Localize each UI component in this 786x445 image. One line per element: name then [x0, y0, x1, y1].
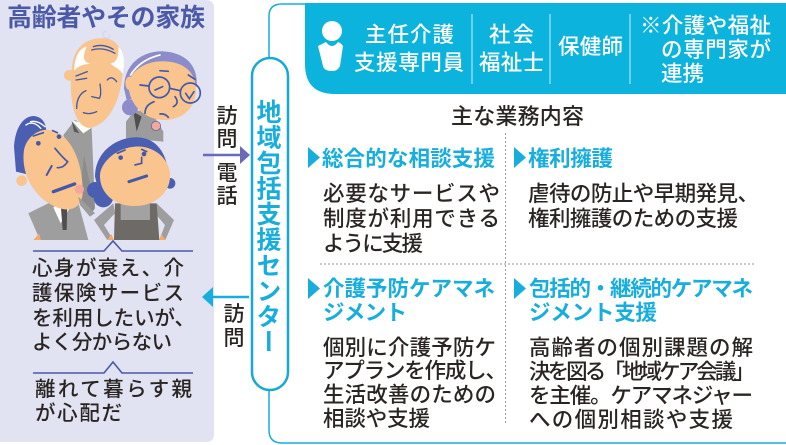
duty: preventive care management: アプランを作成し、 — [323, 359, 507, 383]
speech text two — [35, 378, 192, 425]
label: visit and phone: 電 — [216, 162, 238, 185]
duty: comprehensive continuous care management — [514, 277, 755, 432]
speech text one: 心身が衰え、介 — [32, 257, 184, 280]
arrow: to center — [203, 146, 250, 164]
duty: comprehensive continuous care management: への個別相談や支援 — [529, 408, 733, 432]
duty: general consultation: 必要なサービスや — [323, 182, 500, 206]
label: visit: 訪 — [224, 303, 244, 326]
speech text one: を利用したいが、 — [32, 307, 195, 330]
duty: comprehensive continuous care management: を主催。ケアマネジャー — [529, 384, 753, 408]
role: social worker: 社会 — [489, 23, 534, 47]
speech divider one — [33, 241, 193, 251]
pill: community support center: 地域包括支援センター — [253, 99, 282, 354]
label: visit and phone — [216, 105, 238, 208]
note: cooperation: 連携 — [661, 62, 704, 86]
label: visit and phone: 話 — [216, 185, 238, 208]
role: public health nurse: 保健師 — [558, 35, 623, 59]
illustration: four elderly people — [14, 32, 200, 240]
duty: preventive care management: ジメント — [323, 301, 407, 325]
duty: rights advocacy: 権利擁護 — [528, 147, 613, 171]
duty: rights advocacy: 虐待の防止や早期発見、 — [528, 182, 759, 206]
duty: comprehensive continuous care management: 決を図る「地域ケア会議」 — [529, 360, 755, 384]
label: visit: 問 — [224, 327, 244, 350]
outer frame — [269, 4, 786, 443]
duty: preventive care management: 相談や支援 — [323, 407, 430, 431]
speech text two: 離れて暮らす親 — [35, 378, 192, 401]
duty: general consultation — [308, 147, 500, 256]
note: cooperation: ※介護や福祉 — [640, 14, 771, 38]
role: chief care manager — [354, 23, 464, 75]
duty: comprehensive continuous care management: 高齢者の個別課題の解 — [529, 336, 753, 360]
pill: community support center — [252, 58, 288, 390]
speech text two: が心配だ — [35, 402, 122, 425]
icon: person — [318, 21, 343, 71]
speech text one — [32, 257, 195, 354]
heading: elderly and family: 高齢者やその家族 — [7, 4, 205, 32]
duty: comprehensive continuous care management: ジメント支援 — [529, 301, 657, 325]
duty: preventive care management: 介護予防ケアマネ — [323, 277, 495, 301]
speech divider two — [33, 362, 193, 373]
role: chief care manager: 支援専門員 — [354, 51, 464, 75]
duty: general consultation: 制度が利用できる — [323, 207, 500, 231]
duty: general consultation: ように支援 — [323, 232, 423, 256]
role: social worker — [479, 23, 544, 75]
label: visit — [224, 303, 244, 350]
duty: rights advocacy — [514, 147, 759, 231]
panel: elderly and family — [0, 0, 214, 442]
duty: general consultation: 総合的な相談支援 — [322, 147, 495, 171]
label: visit and phone: 問 — [216, 128, 238, 151]
arrow: to family — [202, 287, 249, 307]
duty: rights advocacy: 権利擁護のための支援 — [528, 207, 738, 231]
duty: preventive care management: 個別に介護予防ケ — [323, 336, 496, 360]
label: visit and phone: 訪 — [216, 105, 238, 128]
role: social worker: 福祉士 — [479, 51, 544, 75]
speech text one: よく分からない — [32, 331, 172, 354]
heading: main duties: 主な業務内容 — [451, 104, 584, 129]
header band: professionals — [305, 3, 786, 94]
duty: preventive care management — [308, 277, 507, 431]
note: cooperation — [640, 14, 771, 86]
role: chief care manager: 主任介護 — [365, 23, 454, 47]
duty: comprehensive continuous care management: 包括的・継続的ケアマネ — [529, 277, 753, 301]
duty: preventive care management: 生活改善のための — [323, 383, 496, 407]
speech text one: 護保険サービス — [32, 282, 184, 305]
note: cooperation: の専門家が — [661, 38, 771, 62]
